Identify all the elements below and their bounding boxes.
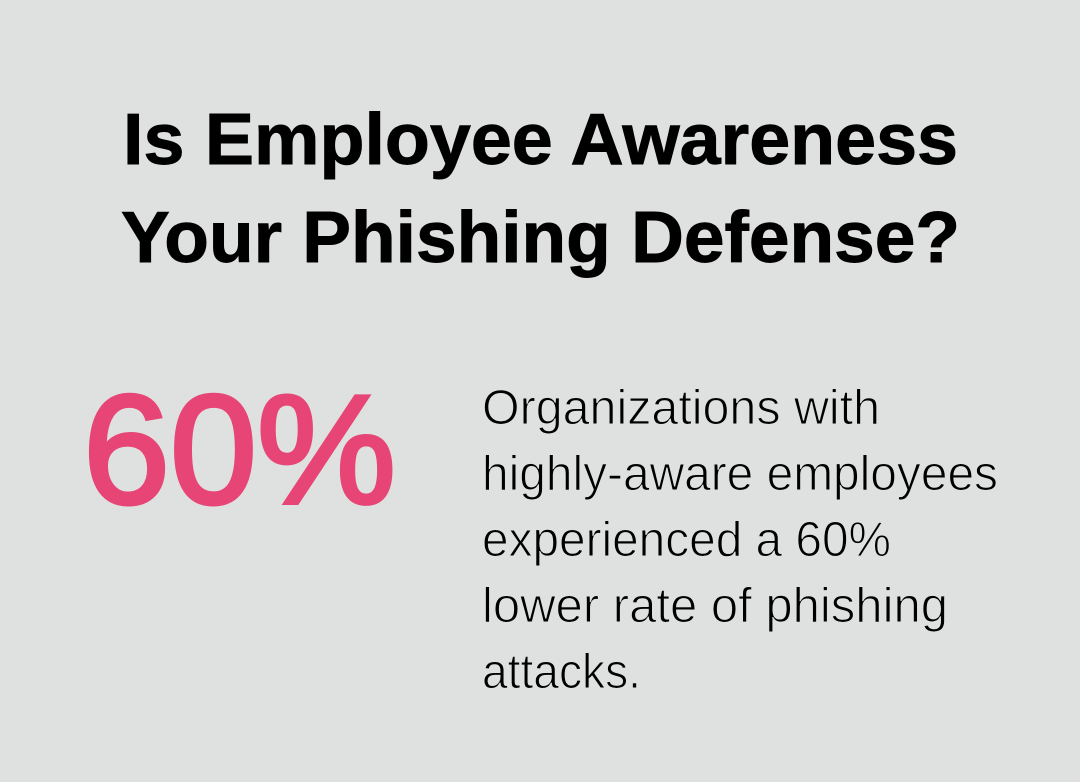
description text: Organizations with	[482, 381, 880, 435]
title: Is Employee Awareness	[123, 100, 958, 180]
title: Your Phishing Defense?	[121, 198, 960, 278]
description text: lower rate of phishing	[482, 579, 948, 633]
description text: highly-aware employees	[482, 447, 998, 501]
description text: attacks.	[482, 645, 641, 699]
title	[121, 100, 960, 278]
big statistic: 60%: 60%	[83, 363, 396, 536]
description text	[482, 381, 998, 699]
description text: experienced a 60%	[482, 513, 891, 567]
